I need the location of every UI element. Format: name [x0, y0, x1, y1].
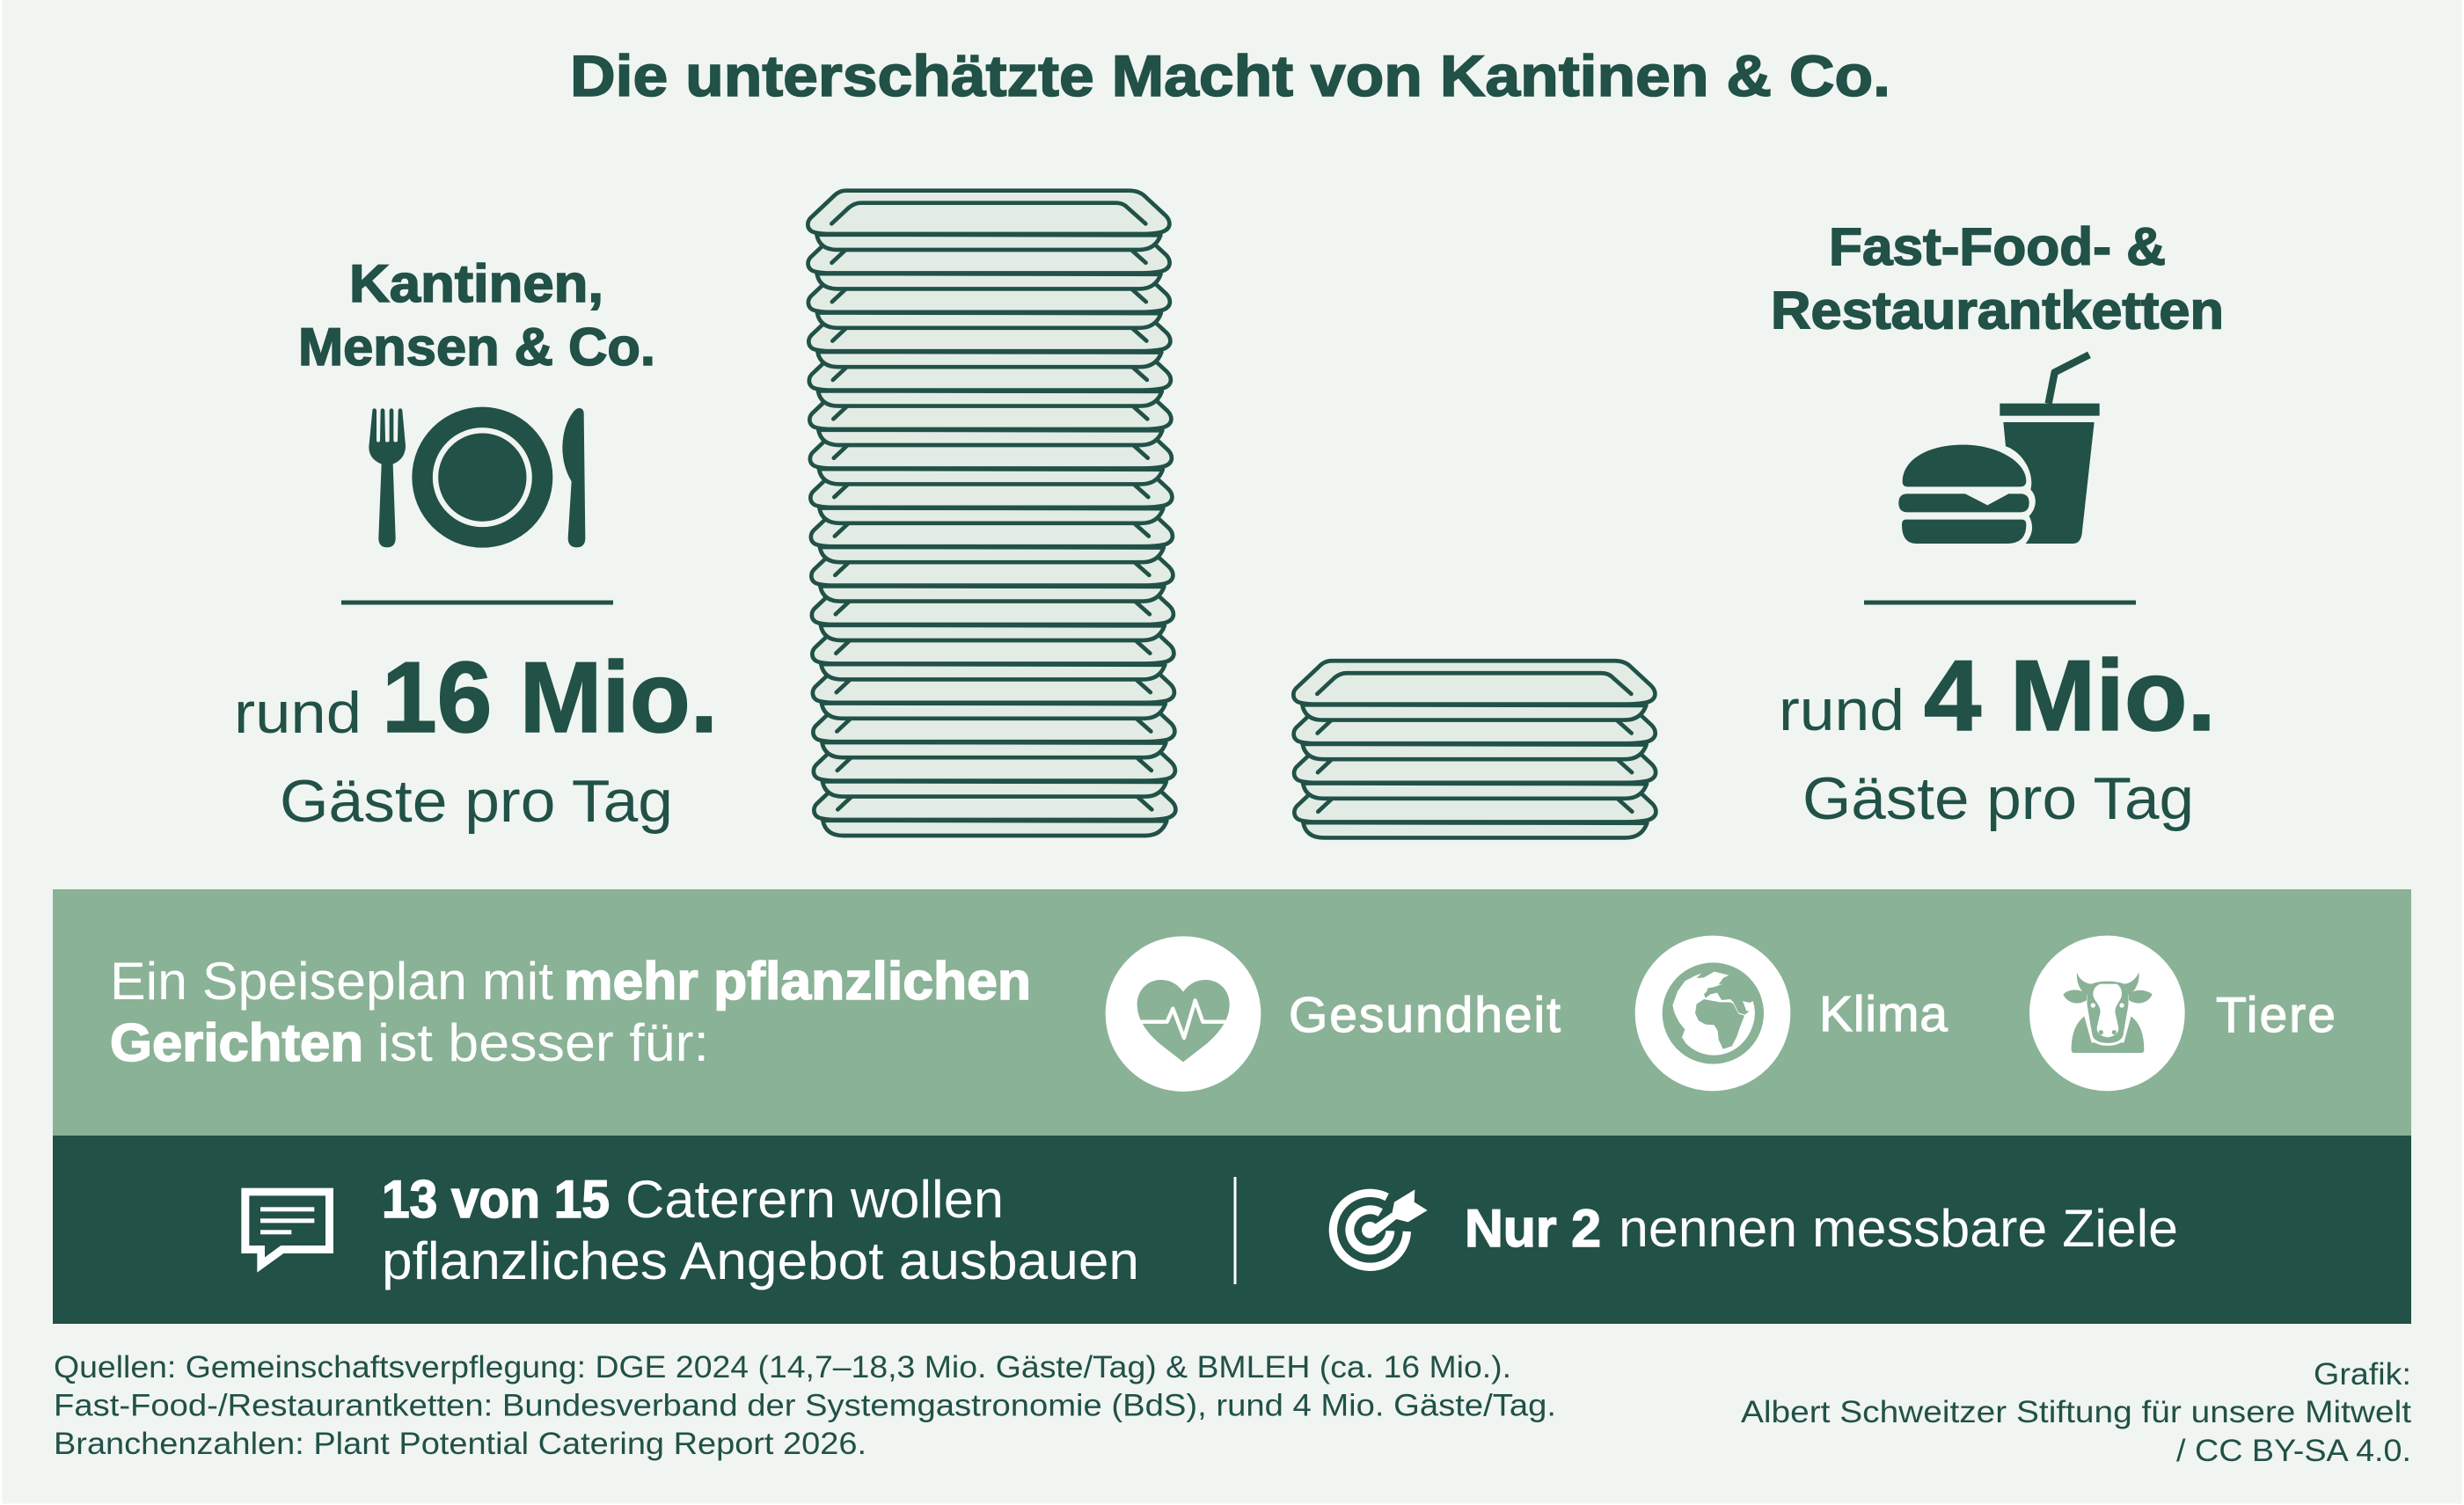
heading: Kantinen, Mensen & Co.: Mensen & Co.	[298, 318, 655, 376]
panel: green benefits band	[53, 889, 2411, 1136]
heading: Kantinen, Mensen & Co.: Kantinen,	[349, 254, 603, 313]
chart: stack of 4 plates	[1293, 661, 1656, 837]
text: sources: Branchenzahlen: Plant Potential Catering Report 2026.	[54, 1427, 866, 1461]
figure: rund 16 Mio.: rund	[234, 680, 362, 745]
figure: rund 4 Mio.: 4 Mio.	[1924, 640, 2216, 752]
text: menu statement: ist besser für:	[377, 1013, 709, 1072]
icon: burger and drink	[1898, 354, 2100, 544]
panel: dark caterer band	[53, 1136, 2411, 1324]
title: Die unterschätzte Macht von Kantinen & Co.	[570, 43, 1890, 108]
figure: rund 16 Mio.: 16 Mio.	[382, 642, 718, 754]
text: sources: Quellen: Gemeinschaftsverpflegung: DGE 2024 (14,7–18,3 Mio. Gäste/Tag) & BMLEH (ca. 16 Mio.).	[54, 1350, 1511, 1384]
label: Gäste pro Tag: Gäste pro Tag	[1802, 765, 2194, 832]
icon: speech bubble	[241, 1188, 333, 1273]
heading: Fast-Food- & Restaurantketten: Fast-Food- &	[1829, 217, 2166, 276]
icon: globe	[1635, 936, 1790, 1091]
heading: Fast-Food- & Restaurantketten: Restaurantketten	[1771, 281, 2224, 340]
text: menu statement	[110, 952, 1031, 1072]
label: Tiere: Tiere	[2216, 987, 2336, 1043]
heading: Kantinen, Mensen & Co.	[298, 254, 655, 376]
text: Nur 2 nennen messbare Ziele: nennen messbare Ziele	[1619, 1199, 2178, 1258]
text: credit: / CC BY-SA 4.0.	[2176, 1434, 2411, 1468]
chart: stack of 16 plates	[808, 191, 1175, 836]
text: credit: Albert Schweitzer Stiftung für unsere Mitwelt	[1741, 1395, 2411, 1429]
figure: rund 4 Mio.	[1779, 640, 2216, 752]
icon: plate with fork and knife	[369, 407, 585, 548]
icon: cow	[2029, 936, 2185, 1091]
text: credit: Grafik:	[2314, 1357, 2411, 1392]
label: Gäste pro Tag: Gäste pro Tag	[280, 768, 673, 835]
icon: heart with pulse	[1106, 936, 1261, 1092]
panel: Fast-Food- & Restaurantketten	[1771, 217, 2224, 832]
text: sources: Fast-Food-/Restaurantketten: Bundesverband der Systemgastronomie (BdS), rund 4 Mio. Gäste/Tag.	[54, 1388, 1556, 1423]
figure: rund 4 Mio.: rund	[1779, 677, 1905, 742]
text: credit	[1741, 1357, 2411, 1468]
icon: target with arrow	[1333, 1189, 1428, 1267]
text: 13 von 15 Caterern: 13 von 15	[382, 1170, 610, 1229]
text: sources	[54, 1350, 1556, 1461]
text: Nur 2 nennen messbare Ziele: Nur 2	[1465, 1199, 1601, 1258]
label: Klima: Klima	[1819, 986, 1948, 1042]
panel: Kantinen, Mensen & Co.	[234, 254, 718, 835]
heading: Fast-Food- & Restaurantketten	[1771, 217, 2224, 340]
text: menu statement: Gerichten	[110, 1013, 363, 1072]
text: 13 von 15 Caterern	[382, 1170, 1139, 1290]
text: menu statement: mehr pflanzlichen	[564, 952, 1031, 1011]
text: 13 von 15 Caterern: Caterern wollen	[625, 1170, 1004, 1229]
label: Gesundheit: Gesundheit	[1289, 987, 1561, 1043]
text: menu statement: Ein Speiseplan mit	[110, 952, 553, 1011]
figure: rund 16 Mio.	[234, 642, 718, 754]
text: 13 von 15 Caterern: pflanzliches Angebot ausbauen	[382, 1231, 1139, 1290]
